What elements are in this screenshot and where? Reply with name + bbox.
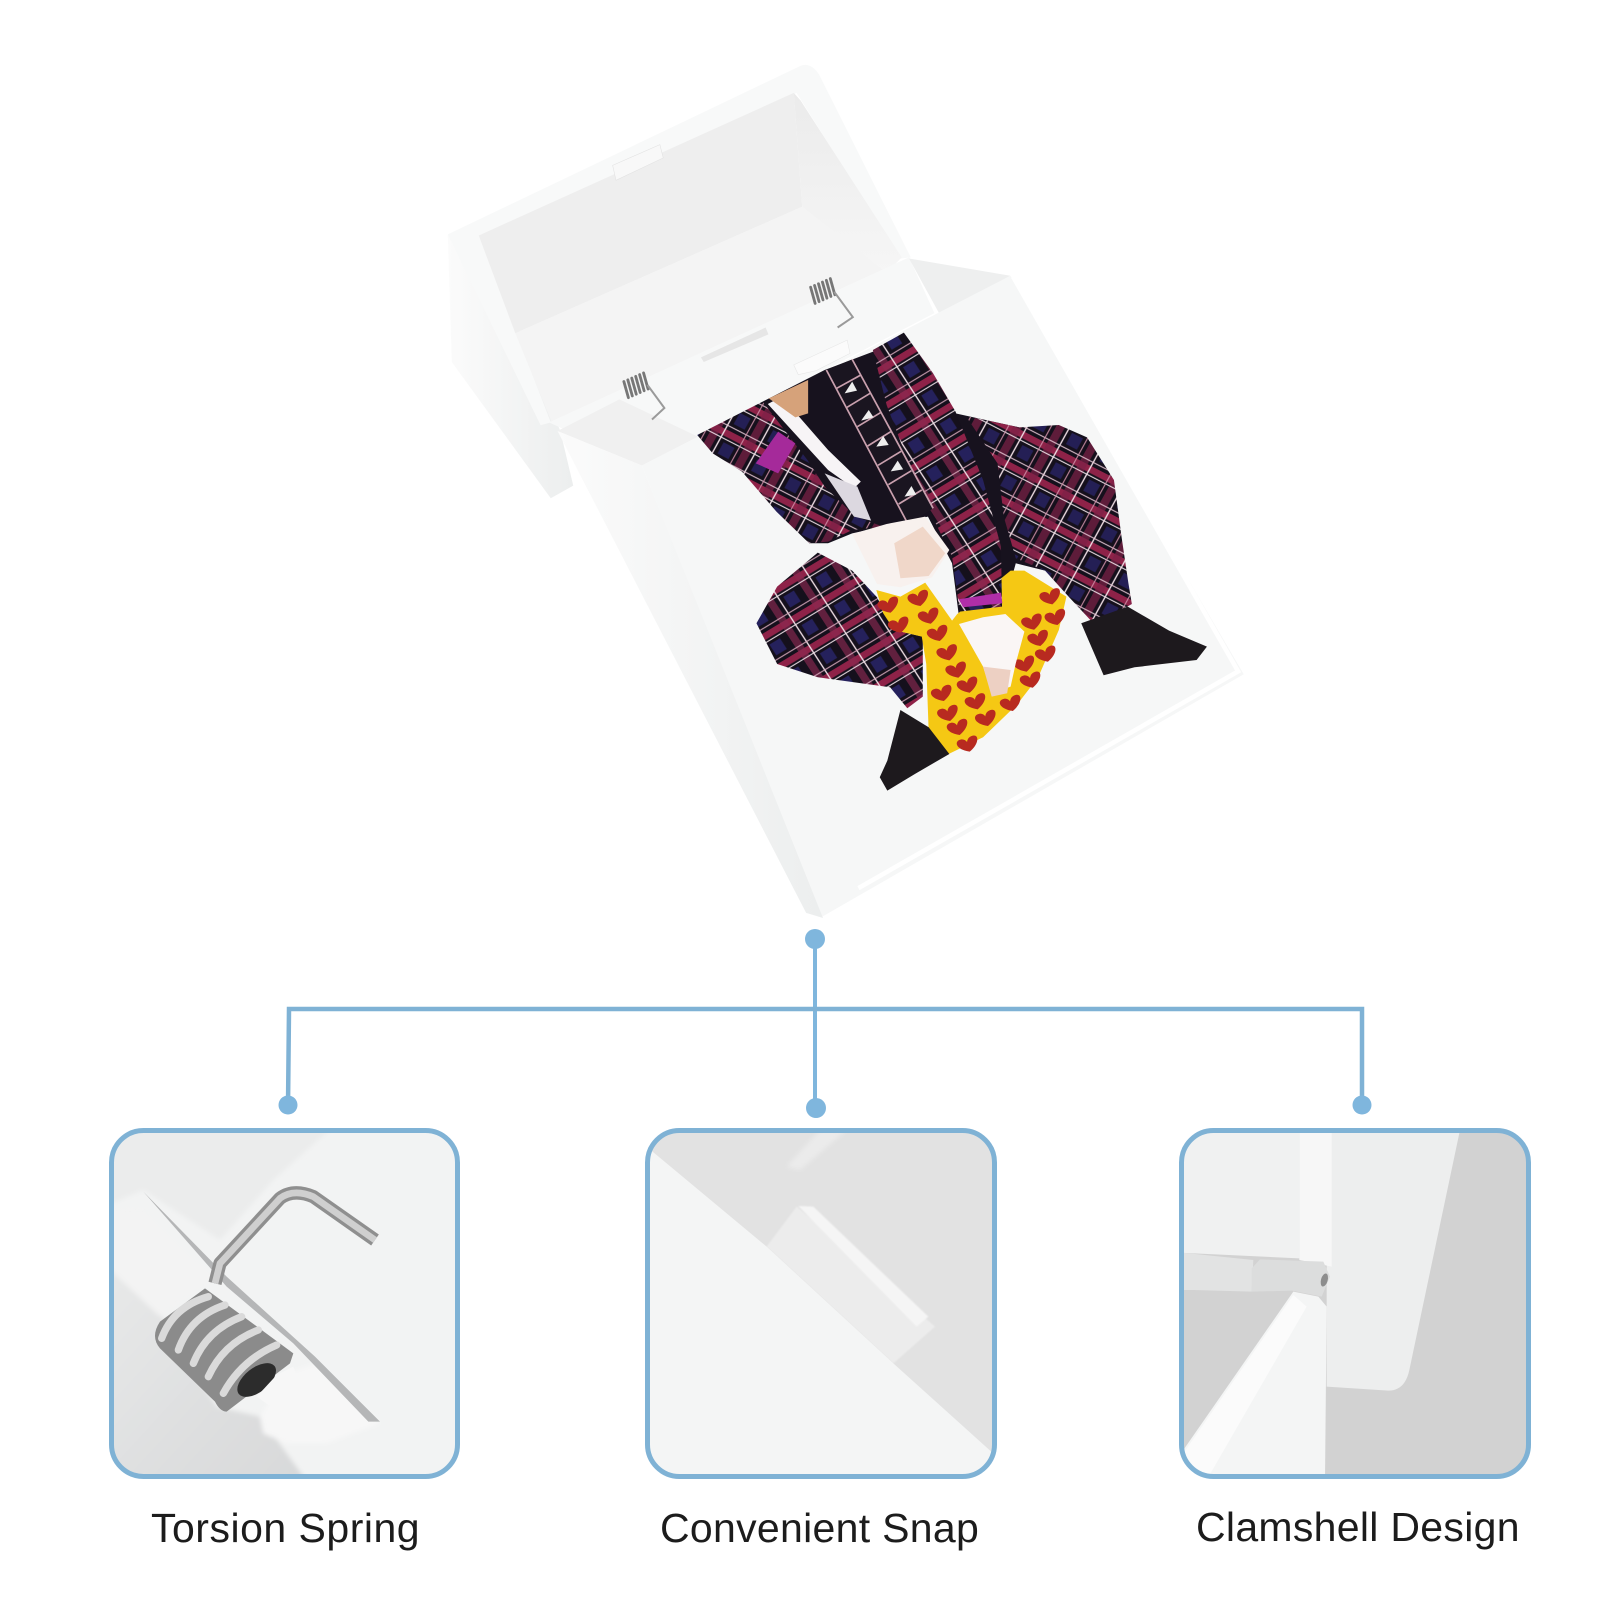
connector lines <box>278 929 1372 1118</box>
groove line <box>143 1192 380 1422</box>
guitar hearts <box>876 587 1068 754</box>
white column <box>1299 1130 1332 1267</box>
upper-left panel <box>1180 1130 1299 1258</box>
central stem <box>813 939 817 1108</box>
hinge barrel right <box>1252 1259 1330 1297</box>
left hand <box>852 517 949 587</box>
printed artwork: guitarist in plaid <box>697 333 1207 791</box>
background shading <box>114 1276 303 1474</box>
right boot <box>1081 607 1207 675</box>
lid panel <box>1327 1130 1460 1391</box>
lower white face <box>647 1147 995 1480</box>
light smear <box>794 1133 836 1166</box>
spring: left hinge <box>624 373 664 420</box>
panel: torsion spring <box>103 1123 460 1483</box>
centre snap slot <box>701 328 768 362</box>
spring: right hinge <box>811 279 853 328</box>
lower white triangle <box>1183 1292 1327 1480</box>
card border <box>648 1130 994 1476</box>
hinge barrel left <box>1182 1253 1253 1292</box>
horizontal bar <box>288 1009 1362 1107</box>
left dot <box>278 1096 298 1114</box>
base interior right <box>909 258 1010 315</box>
right sleeve <box>873 333 1002 612</box>
label: convenient snap: Convenient Snap <box>660 1505 979 1551</box>
lid rim <box>448 65 911 425</box>
label: clamshell design: Clamshell Design <box>1196 1504 1520 1550</box>
middle dot <box>806 1098 826 1118</box>
lid snap tab <box>613 145 663 180</box>
hinge band <box>549 257 934 466</box>
dark torso underlay <box>763 340 1045 617</box>
purple lining <box>756 432 795 473</box>
snap tab <box>767 1206 935 1363</box>
lid outer left face <box>448 234 573 498</box>
coil opening <box>237 1363 276 1397</box>
right hand <box>959 614 1024 697</box>
left leg <box>756 553 923 708</box>
hinge tab <box>794 340 850 375</box>
left sleeve <box>697 402 883 543</box>
left boot <box>880 710 949 791</box>
panel: clamshell design <box>1179 1128 1531 1480</box>
wire hook <box>215 1193 375 1283</box>
product: open clamshell box <box>448 65 1244 918</box>
guitar neck <box>826 359 933 524</box>
panel: convenient snap <box>645 1128 997 1480</box>
card border <box>1182 1130 1528 1476</box>
lid inner floor <box>515 207 887 422</box>
front face bevel <box>858 277 1238 888</box>
purple cuff <box>959 593 1002 607</box>
base interior left <box>558 399 698 466</box>
white shirt strip <box>768 397 861 488</box>
label: torsion spring: Torsion Spring <box>151 1505 420 1551</box>
lid inner right wall <box>794 93 902 276</box>
box left side <box>558 431 823 918</box>
coil <box>155 1288 293 1412</box>
lid inner back wall <box>479 93 802 333</box>
neck skin <box>769 380 808 417</box>
right dot <box>1352 1096 1372 1114</box>
box front face <box>642 276 1244 917</box>
top dot <box>805 929 825 949</box>
guitar body <box>876 571 1066 754</box>
right leg <box>966 416 1132 625</box>
card border <box>112 1130 458 1476</box>
